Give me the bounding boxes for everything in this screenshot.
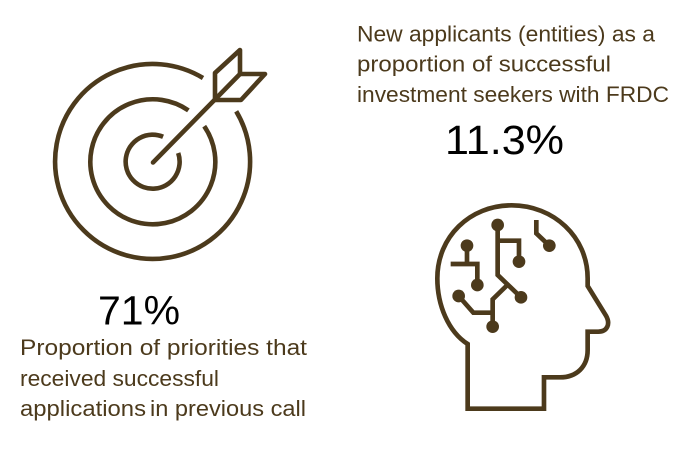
- icon: target with arrow: [55, 50, 265, 259]
- text: new applicants description: [357, 22, 669, 107]
- stat: 11.3%: 11.3%: [445, 117, 564, 163]
- text: new applicants description: investment seekers with FRDC: [357, 82, 669, 107]
- stat: 71%: 71%: [98, 288, 180, 334]
- text: priorities description: [20, 335, 307, 421]
- text: priorities description: applications: [20, 396, 146, 421]
- text: new applicants description: proportion of successful: [357, 52, 611, 76]
- icon: head with circuit brain: [437, 205, 608, 409]
- text: priorities description: in previous call: [150, 396, 306, 421]
- text: priorities description: Proportion of priorities that: [20, 335, 307, 360]
- text: priorities description: received successful: [20, 366, 219, 391]
- text: new applicants description: New applicants (entities) as a: [357, 22, 656, 46]
